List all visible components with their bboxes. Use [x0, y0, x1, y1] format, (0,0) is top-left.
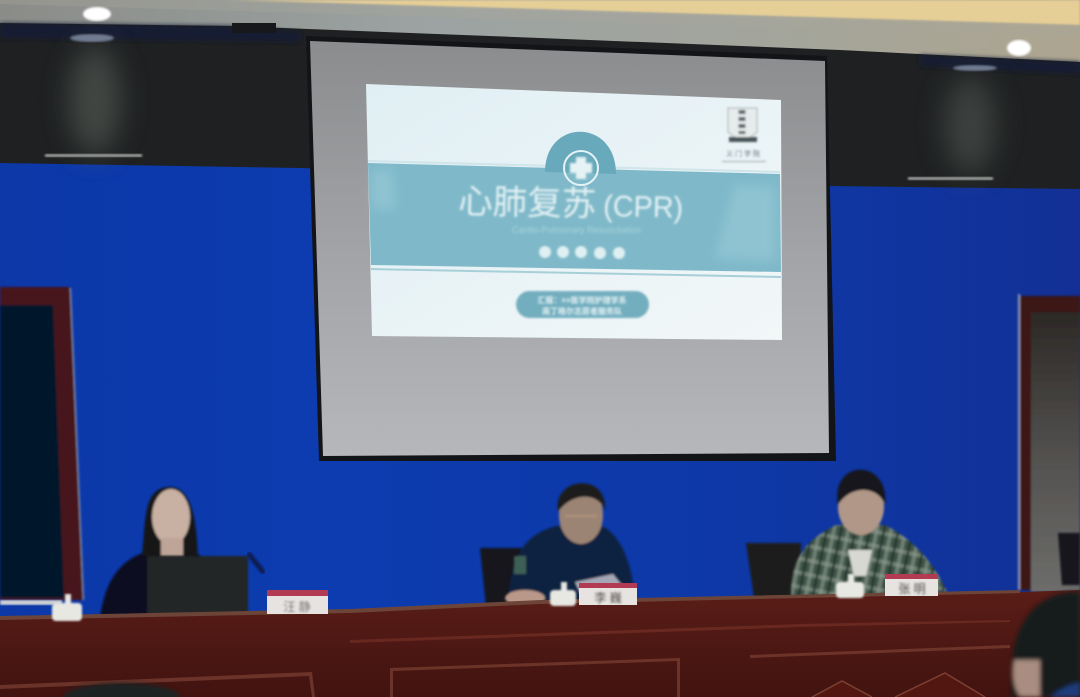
- officer: [505, 483, 637, 606]
- dark upper wall band: [0, 23, 1080, 189]
- slide pill: [516, 291, 649, 318]
- audience head: bottom left: [64, 683, 180, 697]
- projection screen: [306, 36, 836, 461]
- slide crest: 义 门 学 院: [726, 149, 760, 158]
- right door: [1018, 294, 1080, 592]
- microphone: [248, 553, 264, 573]
- chair: far right: [1058, 533, 1080, 585]
- audience head: bottom right: [1011, 592, 1080, 697]
- slide: [366, 84, 782, 340]
- banner texture: [372, 170, 775, 260]
- slide icons: [539, 246, 625, 259]
- name card: left: 汪 静: [283, 600, 311, 614]
- cream ceiling wedge: [225, 0, 1080, 25]
- teacup: centre: [550, 582, 576, 606]
- slide crest: [722, 108, 766, 162]
- desk: [0, 590, 1080, 697]
- woman presenter: [100, 487, 205, 618]
- slide subtitle: Cardio-Pulmonary Resuscitation: [512, 225, 641, 235]
- wall panel reflections: [69, 45, 121, 155]
- left door: [0, 287, 84, 600]
- slide banner: [368, 163, 781, 272]
- name card: right: 张 明: [898, 582, 926, 596]
- ceiling: [0, 0, 1080, 70]
- left white ledge: [0, 600, 62, 605]
- slide title: (CPR): [603, 190, 684, 225]
- chair: right of man: [746, 543, 801, 598]
- name card: right: [885, 574, 938, 596]
- slide pill: 南丁格尔志愿者服务队: [542, 306, 622, 316]
- teacup: left: [52, 594, 82, 621]
- ceiling light: right: [1007, 40, 1031, 56]
- teacup: right: [836, 574, 864, 598]
- cross badge: [545, 132, 616, 185]
- man in plaid shirt: [791, 470, 947, 597]
- ceiling light: left: [83, 7, 111, 21]
- slide title: 心肺复苏: [458, 183, 597, 224]
- blue wall: [0, 150, 1080, 630]
- name card: centre: [579, 583, 637, 605]
- name card: left: [267, 590, 328, 614]
- chair: left of officer: [480, 548, 522, 606]
- slide pill: 汇报：××医学院护理学系: [537, 295, 627, 305]
- banner lines: [368, 160, 780, 173]
- laptop: [147, 556, 248, 616]
- slide title: [458, 183, 684, 225]
- name card: centre: 李 巍: [594, 590, 622, 605]
